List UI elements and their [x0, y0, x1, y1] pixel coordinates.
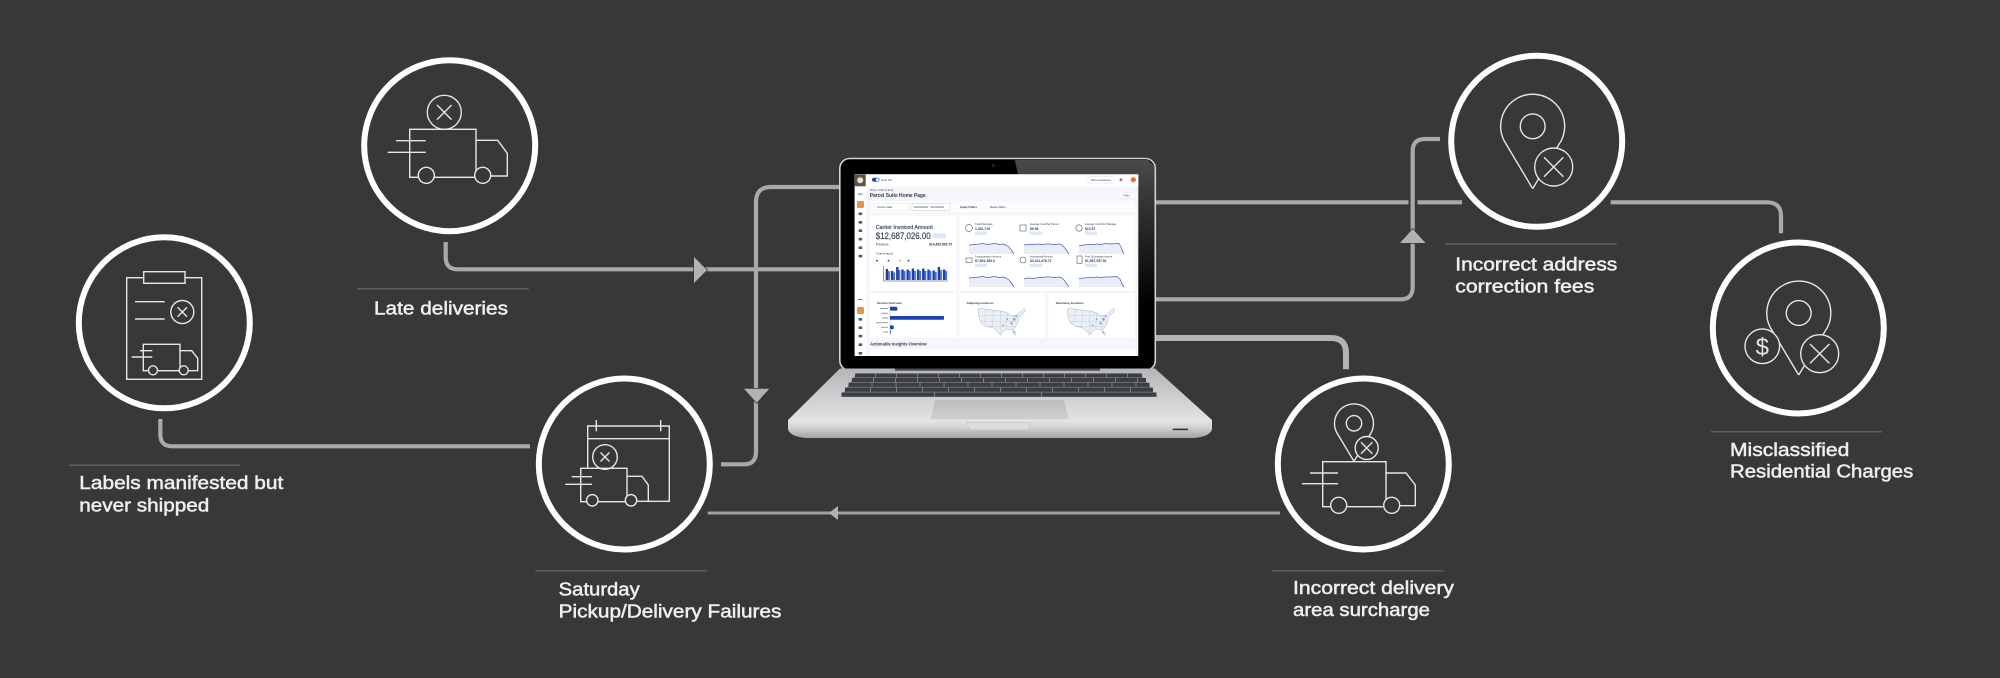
ring — [1278, 378, 1449, 550]
KPI card — [959, 216, 1135, 291]
insights heading: Actionable Insights Overview — [870, 342, 927, 347]
icon: clipboard with truck — [127, 272, 202, 379]
receiving locations map card: Receiving locations — [1056, 301, 1084, 305]
sidebar — [855, 174, 866, 356]
arrow: late deliveries — [694, 257, 707, 283]
divider and label: Incorrect address — [1455, 254, 1617, 275]
KPI text: Fuel Surcharge Amount — [1085, 254, 1113, 258]
laptop base deck — [788, 368, 1212, 420]
connector: address circle to residential — [1611, 202, 1781, 233]
shipping locations map card: Shipping locations — [967, 301, 994, 305]
connector: laptop to delivery surcharge — [1154, 338, 1346, 369]
divider and label: Misclassified — [1730, 439, 1849, 460]
invoiced amount card: Total Analysis — [876, 252, 894, 256]
KPI text: $3,411,476.71 — [1030, 259, 1052, 263]
divider and label: Saturday — [559, 579, 641, 600]
divider and label: Late deliveries — [374, 298, 508, 319]
sparklines — [969, 244, 1124, 287]
KPI text: Average Cost Per Package — [1085, 222, 1117, 226]
camera — [992, 164, 995, 167]
node: labels manifested but never shipped — [69, 237, 283, 516]
divider and label — [1272, 571, 1455, 620]
divider and label: Labels manifested but — [79, 472, 283, 493]
icon: late truck — [388, 95, 507, 183]
breadcrumb: Home / Parcel Suite — [870, 189, 894, 192]
user avatar — [1131, 177, 1136, 182]
filter row: Apply Filters — [960, 205, 977, 209]
connector: Saturday to laptop — [721, 187, 842, 464]
settings icon — [1120, 178, 1122, 181]
KPI pills — [975, 232, 1097, 267]
KPI text: Accessorial Amount — [1030, 254, 1053, 258]
shipping locations map card — [959, 293, 1045, 338]
filter row: Reset Filters — [990, 205, 1006, 209]
service overview card: Service Overview — [877, 301, 903, 305]
node: Saturday pickup/delivery failures — [535, 378, 781, 622]
connector: labels manifested to Saturday — [160, 419, 530, 446]
legend dots — [876, 260, 909, 262]
sidebar icons — [857, 194, 864, 355]
filter row: Invoice Date — [877, 205, 893, 209]
laptop front lip — [788, 420, 1212, 438]
divider and label — [535, 571, 781, 622]
connector: delivery surcharge to Saturday — [708, 512, 1280, 514]
lid notch — [967, 423, 1031, 430]
top bar — [855, 174, 1138, 186]
KPI text: $9.06 — [1030, 227, 1039, 231]
divider and label: never shipped — [79, 495, 209, 516]
KPI text: $1,567,057.51 — [1085, 259, 1107, 263]
connector lines and arrows — [160, 139, 1781, 520]
ring — [79, 237, 250, 408]
KPI text: Average Cost Per Parcel — [1030, 222, 1059, 226]
icon: pin with dollar and cross — [1745, 281, 1839, 375]
laptop lid — [840, 158, 1155, 370]
KPI text: Transportation Amount — [975, 254, 1001, 258]
KPI text: $7,801,393.3 — [975, 259, 995, 263]
connector: laptop to address circle — [1154, 200, 1462, 204]
KPI text: 1,301,710 — [975, 227, 990, 231]
invoiced amount card: Carrier Invoiced Amount — [876, 225, 933, 231]
divider and label — [69, 465, 283, 516]
filter button — [1119, 192, 1135, 198]
ring — [1451, 56, 1622, 227]
filter row: 01/01/2024 - 12/31/2024 — [914, 205, 944, 209]
invoiced amount card: $12,687,026.00 — [876, 231, 931, 241]
page title: Parcel Suite Home Page — [870, 193, 926, 199]
connector: laptop to address correction — [1154, 139, 1440, 299]
icon: pin with dollar and cross: $ — [1756, 334, 1769, 361]
arrow: Saturday upward line — [744, 389, 769, 403]
KPI text: $10.57 — [1085, 227, 1095, 231]
arrow: delivery surcharge — [829, 506, 838, 520]
KPI icons — [966, 225, 1082, 264]
filter button: Filter — [1124, 193, 1130, 197]
divider and label — [1711, 432, 1913, 482]
lid reflection — [1015, 160, 1154, 305]
divider and label — [1445, 244, 1617, 297]
invoiced amount card — [870, 216, 957, 291]
divider and label: Residential Charges — [1730, 461, 1913, 482]
ring — [364, 60, 535, 231]
node: misclassified residential charges — [1711, 242, 1913, 482]
ring — [539, 378, 710, 550]
KPI text — [975, 222, 1117, 263]
node: late deliveries — [357, 60, 535, 319]
divider and label: Pickup/Delivery Failures — [559, 601, 781, 622]
customer button: Demo Customer — [1091, 178, 1111, 182]
arrow: address correction — [1400, 229, 1426, 243]
divider and label: correction fees — [1455, 276, 1594, 297]
toggle: New FO — [881, 178, 893, 182]
icon: pin with truck — [1302, 404, 1415, 513]
divider and label: Incorrect delivery — [1293, 577, 1455, 598]
dashboard screen — [855, 174, 1138, 356]
laptop — [788, 158, 1212, 438]
toggle — [872, 178, 893, 182]
KPI text: Total Packages — [975, 222, 993, 226]
node: incorrect address correction fees — [1445, 56, 1622, 297]
bar chart — [884, 266, 948, 281]
invoiced amount card: Previous — [876, 242, 889, 246]
customer button — [1088, 177, 1114, 183]
icon: calendar with truck — [565, 420, 669, 506]
receiving locations map card — [1048, 293, 1135, 338]
keyboard — [841, 373, 1157, 397]
trackpad — [931, 400, 1069, 419]
hinge — [895, 368, 1100, 371]
connector: late deliveries to laptop — [446, 242, 842, 269]
icon: pin with cross — [1501, 94, 1573, 189]
ring — [1713, 242, 1884, 414]
divider and label: area surcharge — [1293, 599, 1430, 620]
service overview card — [870, 293, 957, 338]
node: incorrect delivery area surcharge — [1272, 378, 1455, 620]
bottom strip — [870, 349, 1135, 356]
power indicator — [1173, 429, 1188, 430]
invoiced amount card: $14,465,865.75 — [929, 242, 952, 246]
filter row — [870, 201, 1135, 212]
logo — [855, 174, 866, 186]
